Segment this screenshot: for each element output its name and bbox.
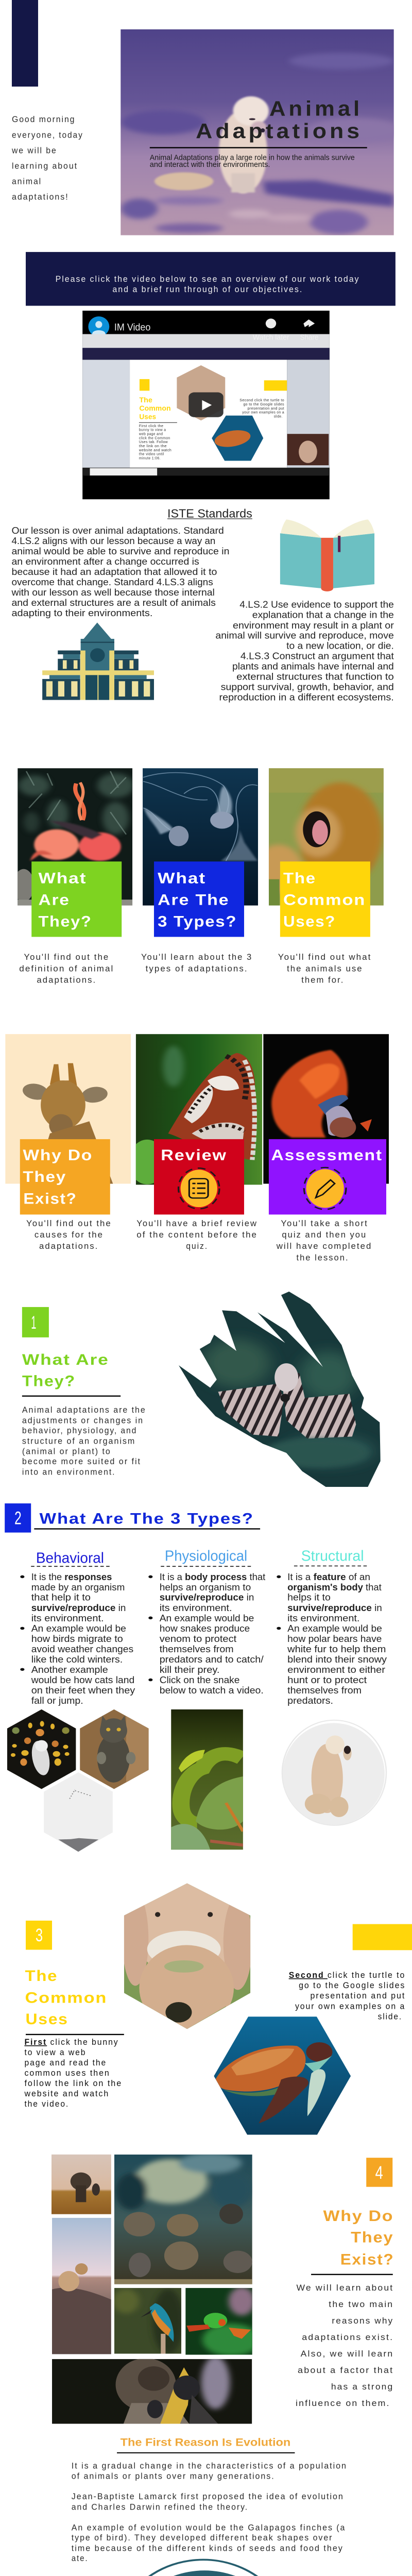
first instruction paragraph: page and read the: [24, 2058, 107, 2067]
why they exist paragraph: We will learn about: [297, 2283, 393, 2292]
darwin's finches diagram: [114, 2560, 294, 2576]
subheading: first reason: The First Reason Is Evolution: [121, 2436, 290, 2448]
why they exist paragraph: adaptations exist.: [302, 2332, 393, 2342]
hexagon photo: bunny: [122, 1878, 252, 2030]
why they exist paragraph: about a factor that: [298, 2365, 393, 2375]
first instruction paragraph: website and watch: [24, 2089, 109, 2098]
label: the common uses: [280, 861, 370, 937]
number badge 3: 3: [36, 1925, 43, 1945]
card photo: flamingos: [18, 768, 133, 906]
hexagon photo: sea turtle: [214, 2016, 351, 2134]
lesson alignment paragraph: [11, 526, 229, 618]
definition paragraph: become more suited or fit: [22, 1456, 141, 1466]
card caption two: You'll learn about the 3: [141, 952, 252, 962]
physiological bullet list: themselves from: [160, 1645, 234, 1654]
structural bullet list: It is a feature of an: [287, 1572, 370, 1583]
photo: leopard on rock: [52, 2217, 111, 2354]
label: what are the 3 types: [154, 861, 244, 937]
greeting text: adaptations!: [12, 192, 69, 201]
card caption four: [26, 1218, 112, 1251]
number badge 2: 2: [14, 1508, 22, 1528]
first instruction paragraph: to view a web: [24, 2047, 86, 2057]
structural bullet list: An example would be: [287, 1623, 382, 1634]
card caption six: [276, 1218, 372, 1262]
physiological bullet list: [148, 1572, 265, 1696]
standards description: [215, 600, 394, 703]
column heading: behavioral: Behavioral: [36, 1550, 104, 1566]
embedded video thumbnail: Uses: [139, 413, 156, 421]
number badge 2: [5, 1503, 31, 1533]
card photo: giraffe: [5, 1034, 131, 1184]
card caption three: [278, 952, 371, 985]
number badge 1: [22, 1307, 49, 1337]
overview cards row two: [5, 1034, 389, 1262]
embedded video thumbnail: Common: [139, 404, 171, 413]
physiological bullet list: An example would be: [160, 1613, 254, 1623]
section heading: why do they exist: Exist?: [340, 2251, 394, 2268]
label: review: Review: [161, 1147, 227, 1164]
definition paragraph: (animal or plant) to: [22, 1447, 111, 1456]
structural bullet list: its environment.: [287, 1613, 359, 1623]
embedded video thumbnail: presentation and put: [248, 406, 284, 410]
label: why do they exist: Exist?: [23, 1190, 77, 1207]
behavioral bullet list: how birds migrate to: [31, 1634, 123, 1644]
card caption one: definition of animal: [19, 964, 114, 973]
embedded video thumbnail: your own examples on a: [242, 411, 284, 414]
definition paragraph: Animal adaptations are the: [22, 1405, 146, 1415]
title: Adaptations: [196, 120, 363, 143]
embedded video thumbnail: click the Common: [139, 436, 170, 440]
lesson alignment paragraph: overcome that change. Standard 4.LS.3 aligns: [11, 577, 213, 587]
behavioral bullet list: that help it to: [31, 1592, 91, 1603]
structural bullet list: themselves from: [287, 1685, 362, 1696]
definition paragraph: structure of an organism: [22, 1436, 135, 1446]
section heading: what are they: They?: [22, 1373, 76, 1390]
structural bullet list: environment to either: [287, 1665, 385, 1675]
physiological bullet list: predators and to catch/: [160, 1654, 264, 1665]
hero photo: arctic fox on snow: [121, 29, 394, 235]
number badge 1: 1: [31, 1313, 36, 1333]
label: what are they: Are: [38, 891, 70, 908]
section heading: the common uses: Uses: [25, 2011, 68, 2028]
card caption four: causes for the: [35, 1230, 104, 1240]
label: what are the 3 types: What: [158, 870, 206, 887]
photo: kingfisher: [114, 2287, 181, 2353]
video instruction banner: and a brief run through of our objectives.: [112, 284, 303, 294]
subheading rule: [117, 2452, 295, 2453]
why they exist paragraph: Also, we will learn: [301, 2349, 393, 2359]
ISTE heading: ISTE Standards: [167, 507, 252, 520]
why they exist paragraph: the two main: [329, 2299, 393, 2309]
card caption one: adaptations.: [37, 975, 96, 985]
definition paragraph: adjustments or changes in: [22, 1416, 144, 1425]
evolution paragraph: ate.: [72, 2553, 88, 2563]
behavioral bullet list: It is the responses: [31, 1572, 112, 1583]
evolution paragraph: and Charles Darwin refined the theory.: [72, 2502, 248, 2512]
section 1 and section 2 heading: [5, 1290, 387, 1706]
structural bullet list: helps it to: [287, 1592, 331, 1603]
definition paragraph: [22, 1405, 146, 1477]
physiological bullet list: helps an organism to: [160, 1582, 251, 1592]
label: the common uses: Common: [283, 891, 366, 908]
embedded video thumbnail: minute 1:06.: [139, 456, 161, 460]
lesson alignment paragraph: adapting to their environments.: [11, 608, 152, 618]
structural bullet list: white fur to help them: [287, 1645, 386, 1654]
embedded video thumbnail: Uses tab. Follow: [139, 440, 168, 444]
section 4 and evolution: [52, 2274, 393, 2563]
heading rule: [34, 1528, 260, 1530]
evolution paragraph: of animals or plants over many generations.: [72, 2471, 275, 2481]
card caption six: quiz and then you: [282, 1230, 367, 1240]
photo: sea turtles: [114, 2155, 252, 2284]
greeting text: [11, 115, 83, 201]
embedded video thumbnail: slide.: [274, 415, 282, 418]
definition paragraph: into an environment.: [22, 1467, 115, 1477]
why they exist paragraph: reasons why: [332, 2316, 393, 2325]
embedded video thumbnail: IM Video: [114, 321, 150, 333]
hexagon photo: birds over mountain: [44, 1772, 113, 1852]
greeting text: everyone, today: [12, 130, 83, 140]
lesson alignment paragraph: animal would be able to survive and reproduce in: [11, 546, 229, 556]
physiological bullet list: It is a body process that: [160, 1572, 265, 1583]
why they exist paragraph: [296, 2283, 393, 2408]
lesson alignment paragraph: because it had an adaptation that allowed it to: [11, 567, 217, 577]
card photo: jellyfish: [143, 768, 258, 906]
icon: checklist: [178, 1168, 219, 1209]
section heading: the common uses: Common: [25, 1989, 107, 2006]
embedded video thumbnail: The: [139, 396, 152, 404]
why they exist paragraph: has a strong: [331, 2382, 393, 2392]
photo: red-eyed tree frog: [185, 2287, 252, 2354]
lesson alignment paragraph: an environment after a change occurred is: [11, 556, 199, 567]
column heading: physiological: Physiological: [165, 1548, 247, 1564]
header section: [11, 0, 402, 306]
structural bullet list: blend into their snowy: [287, 1654, 387, 1665]
structural bullet list: how polar bears have: [287, 1634, 382, 1644]
physiological bullet list: venom to protect: [160, 1634, 236, 1644]
subtitle: and interact with their environments.: [150, 160, 270, 169]
first instruction paragraph: [24, 2037, 122, 2108]
card caption four: adaptations.: [39, 1242, 98, 1251]
card caption one: You'll find out the: [24, 952, 109, 962]
section heading: what are they: [22, 1351, 109, 1390]
embedded video thumbnail: [82, 311, 330, 499]
section 2 photos: [7, 1709, 386, 2030]
card caption one: [19, 952, 114, 985]
lesson alignment paragraph: and external structures are a result of animals: [11, 598, 216, 608]
evolution paragraph: [72, 2461, 347, 2563]
number badge 3: [26, 1921, 52, 1950]
embedded video thumbnail: website and watch: [139, 448, 171, 452]
greeting text: we will be: [11, 146, 57, 155]
label: what are the 3 types: Are The: [158, 891, 229, 908]
title: [196, 97, 363, 143]
subtitle: [150, 153, 355, 169]
structural bullet list: hunt or to protect: [287, 1675, 367, 1685]
behavioral bullet list: like the cold winters.: [31, 1654, 123, 1665]
card caption four: You'll find out the: [26, 1218, 112, 1228]
card caption six: the lesson.: [297, 1253, 349, 1262]
title: Animal: [269, 97, 363, 121]
card caption five: [136, 1218, 258, 1251]
evolution paragraph: type of bird). They developed different beak shapes over: [72, 2533, 333, 2543]
why they exist paragraph: influence on them.: [296, 2398, 390, 2408]
card photo: butterfly: [136, 1034, 263, 1185]
card caption five: quiz.: [186, 1242, 208, 1251]
definition paragraph: behavior, physiology, and: [22, 1426, 137, 1435]
structural bullet list: predators.: [287, 1696, 333, 1706]
heading rule: [26, 2034, 124, 2035]
label: review: [154, 1139, 244, 1214]
number badge 4: 4: [375, 2163, 383, 2183]
label: what are the 3 types: 3 Types?: [158, 913, 237, 930]
label: assessment: Assessment: [271, 1147, 383, 1164]
behavioral bullet list: An example would be: [31, 1623, 126, 1634]
greeting text: learning about: [12, 161, 78, 171]
first instruction paragraph: First click the bunny: [24, 2037, 119, 2047]
lesson alignment paragraph: Our lesson is over animal adaptations. Standard: [11, 526, 224, 536]
icon: open book: [280, 519, 374, 591]
label: what are they: They?: [38, 913, 92, 930]
number badge 4: [366, 2158, 392, 2187]
title rule: [150, 147, 367, 148]
card caption five: of the content before the: [136, 1230, 258, 1240]
hexagon photo: cat with leaves: [7, 1709, 76, 1789]
card caption two: types of adaptations.: [146, 964, 248, 973]
embedded video thumbnail: bunny to view a: [139, 428, 166, 432]
section 3 and 4 intro: [24, 1921, 412, 2354]
heading rule: [22, 1396, 121, 1397]
brush-masked zebra photo: [174, 1290, 384, 1487]
behavioral bullet list: on their feet when they: [31, 1685, 135, 1696]
behavioral bullet list: would be how cats land: [31, 1675, 134, 1685]
greeting text: animal: [12, 177, 42, 186]
structural bullet list: survive/reproduce in: [287, 1603, 382, 1613]
label: why do they exist: [20, 1139, 110, 1214]
physiological bullet list: Click on the snake: [160, 1675, 239, 1685]
second instruction paragraph: [289, 1970, 405, 2021]
first instruction paragraph: the video.: [24, 2099, 69, 2108]
embedded video thumbnail: Second click the turtle to: [239, 398, 284, 402]
embedded video thumbnail: Share: [300, 333, 318, 342]
embedded video thumbnail: the video until: [139, 452, 164, 456]
icon: pencil: [304, 1167, 346, 1210]
card caption six: You'll take a short: [281, 1218, 368, 1228]
physiological bullet list: below to watch a video.: [160, 1685, 264, 1696]
embedded video thumbnail: First click the: [139, 424, 163, 428]
label: what are they: [31, 861, 122, 937]
first instruction paragraph: follow the link on the: [24, 2078, 122, 2088]
section heading: what are they: What Are: [22, 1351, 109, 1368]
behavioral bullet list: avoid weather changes: [31, 1645, 133, 1654]
label: what are they: What: [38, 870, 87, 887]
navy accent bar: [12, 0, 38, 87]
card photo: lion: [269, 768, 384, 906]
lesson alignment paragraph: with our lesson as well because those internal: [11, 587, 215, 598]
photo: monkey with banana: [52, 2359, 252, 2424]
column heading: structural: Structural: [301, 1548, 364, 1564]
label: the common uses: The: [283, 870, 316, 887]
snake photo: [171, 1709, 243, 1850]
hexagon photo: gray cat: [80, 1709, 149, 1789]
card caption two: [141, 952, 252, 973]
section heading: the common uses: [25, 1968, 107, 2028]
physiological bullet list: survive/reproduce in: [160, 1592, 254, 1603]
overview cards row one: [13, 622, 384, 985]
structural bullet list: organism's body that: [287, 1582, 382, 1592]
structural bullet list: [277, 1572, 387, 1706]
behavioral bullet list: survive/reproduce in: [31, 1603, 126, 1613]
embedded video thumbnail: go to the Google slides: [243, 402, 284, 406]
behavioral bullet list: fall or jump.: [31, 1696, 83, 1706]
embedded video thumbnail: Watch later: [253, 333, 289, 342]
behavioral bullet list: [20, 1572, 135, 1706]
label: assessment: [269, 1139, 386, 1214]
first instruction paragraph: common uses then: [24, 2068, 110, 2078]
section heading: why do they exist: Why Do: [323, 2208, 393, 2225]
photo: elephants: [52, 2155, 111, 2214]
card caption six: will have completed: [276, 1242, 372, 1251]
circular photo: polar bear: [282, 1720, 386, 1825]
second instruction paragraph: slide.: [378, 2012, 402, 2021]
section heading: the 3 types: What Are The 3 Types?: [40, 1511, 254, 1528]
greeting text: Good morning: [12, 115, 75, 124]
label: why do they exist: Why Do: [23, 1147, 93, 1164]
icon: school building: [42, 622, 154, 700]
card caption three: the animals use: [287, 964, 363, 973]
elephant figure: [71, 2173, 100, 2202]
behavioral bullet list: made by an organism: [31, 1582, 125, 1592]
lesson alignment paragraph: 4.LS.2 aligns with our lesson because a way an: [11, 536, 215, 546]
card caption three: You'll find out what: [278, 952, 371, 962]
section heading: why do they exist: They: [351, 2229, 393, 2246]
video and standards section: [11, 311, 394, 703]
section heading: why do they exist: [323, 2208, 394, 2268]
heading rule: [311, 2274, 393, 2275]
yellow accent bar: [353, 1924, 412, 1950]
physiological bullet list: kill their prey.: [160, 1665, 220, 1675]
card caption five: You'll have a brief review: [136, 1218, 258, 1228]
video instruction banner: [26, 252, 396, 306]
behavioral bullet list: Another example: [31, 1665, 108, 1675]
physiological bullet list: its environment.: [160, 1603, 232, 1613]
embedded video thumbnail: web page and: [139, 432, 163, 436]
label: why do they exist: They: [23, 1168, 66, 1185]
natural selection section: [31, 2560, 381, 2576]
embedded video thumbnail: the link on the: [139, 444, 167, 448]
physiological bullet list: how snakes produce: [160, 1623, 250, 1634]
section heading: the common uses: The: [25, 1968, 58, 1985]
card photo: betta fish: [263, 1034, 389, 1184]
behavioral bullet list: its environment.: [31, 1613, 104, 1623]
card caption three: them for.: [301, 975, 344, 985]
label: the common uses: Uses?: [283, 913, 336, 930]
